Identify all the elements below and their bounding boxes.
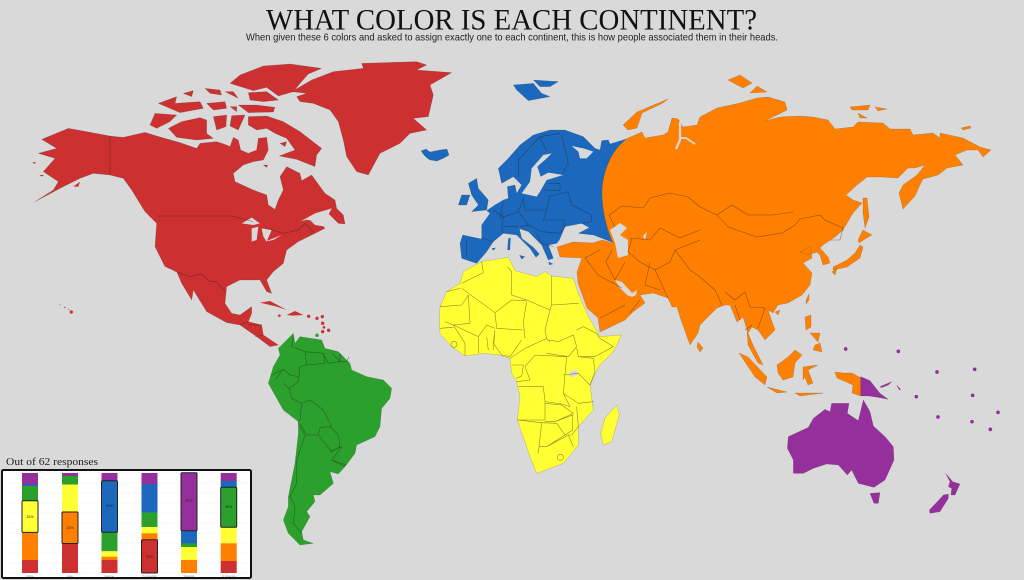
New Zealand xyxy=(929,473,960,513)
bar: South America xyxy=(221,473,237,573)
bar labels: Africa xyxy=(26,574,34,578)
title: WHAT COLOR IS EACH CONTINENT? xyxy=(266,4,757,36)
bar: Asia: 31% xyxy=(66,526,74,530)
bar labels: Asia xyxy=(67,574,73,578)
panel: response chart xyxy=(2,470,251,578)
region: Asia (orange) xyxy=(557,75,991,396)
bar: Europe: 50% xyxy=(106,504,113,508)
bar: South America: 39% xyxy=(225,505,232,509)
Papua New Guinea xyxy=(861,377,901,399)
bar labels: N. America xyxy=(143,574,157,578)
lakes and gulfs xyxy=(242,208,332,242)
bar: Africa xyxy=(22,473,38,573)
Madagascar xyxy=(601,405,619,445)
islands of Asia xyxy=(623,75,971,396)
chart grid xyxy=(7,473,248,573)
Hawaii and Caribbean islands xyxy=(59,301,330,333)
subtitle: When given these 6 colors and asked to assign exactly one to each continent, this is how people associated them in their heads. xyxy=(246,32,778,44)
icon: Iceland (blue) xyxy=(421,149,449,161)
bar: Oceania: 57% xyxy=(185,499,193,503)
bar: North America: 32% xyxy=(146,555,153,559)
legend caption: Out of 62 responses xyxy=(6,456,98,468)
bar labels: Oceania xyxy=(184,574,195,578)
Lake Victoria xyxy=(569,369,578,377)
region: South America (green) xyxy=(268,333,392,545)
bar: Europe xyxy=(102,473,118,573)
seas inside Asia xyxy=(610,122,695,297)
bar: North America xyxy=(142,473,158,573)
Arctic islands xyxy=(32,64,322,187)
bar: Africa: 31% xyxy=(26,515,34,519)
Tasmania xyxy=(870,493,880,503)
bar labels: Europe xyxy=(105,574,114,578)
bar: Oceania xyxy=(181,473,197,573)
region: Africa (yellow) xyxy=(439,257,622,473)
bar labels xyxy=(26,574,236,578)
Pacific islands xyxy=(844,347,1000,431)
region: Oceania (purple) xyxy=(787,347,1000,513)
bar labels: S. America xyxy=(222,574,236,578)
region: North America (red) xyxy=(32,62,452,347)
Greenland xyxy=(292,62,452,175)
region: Europe (blue) xyxy=(458,80,650,265)
bar: Asia xyxy=(62,473,78,573)
